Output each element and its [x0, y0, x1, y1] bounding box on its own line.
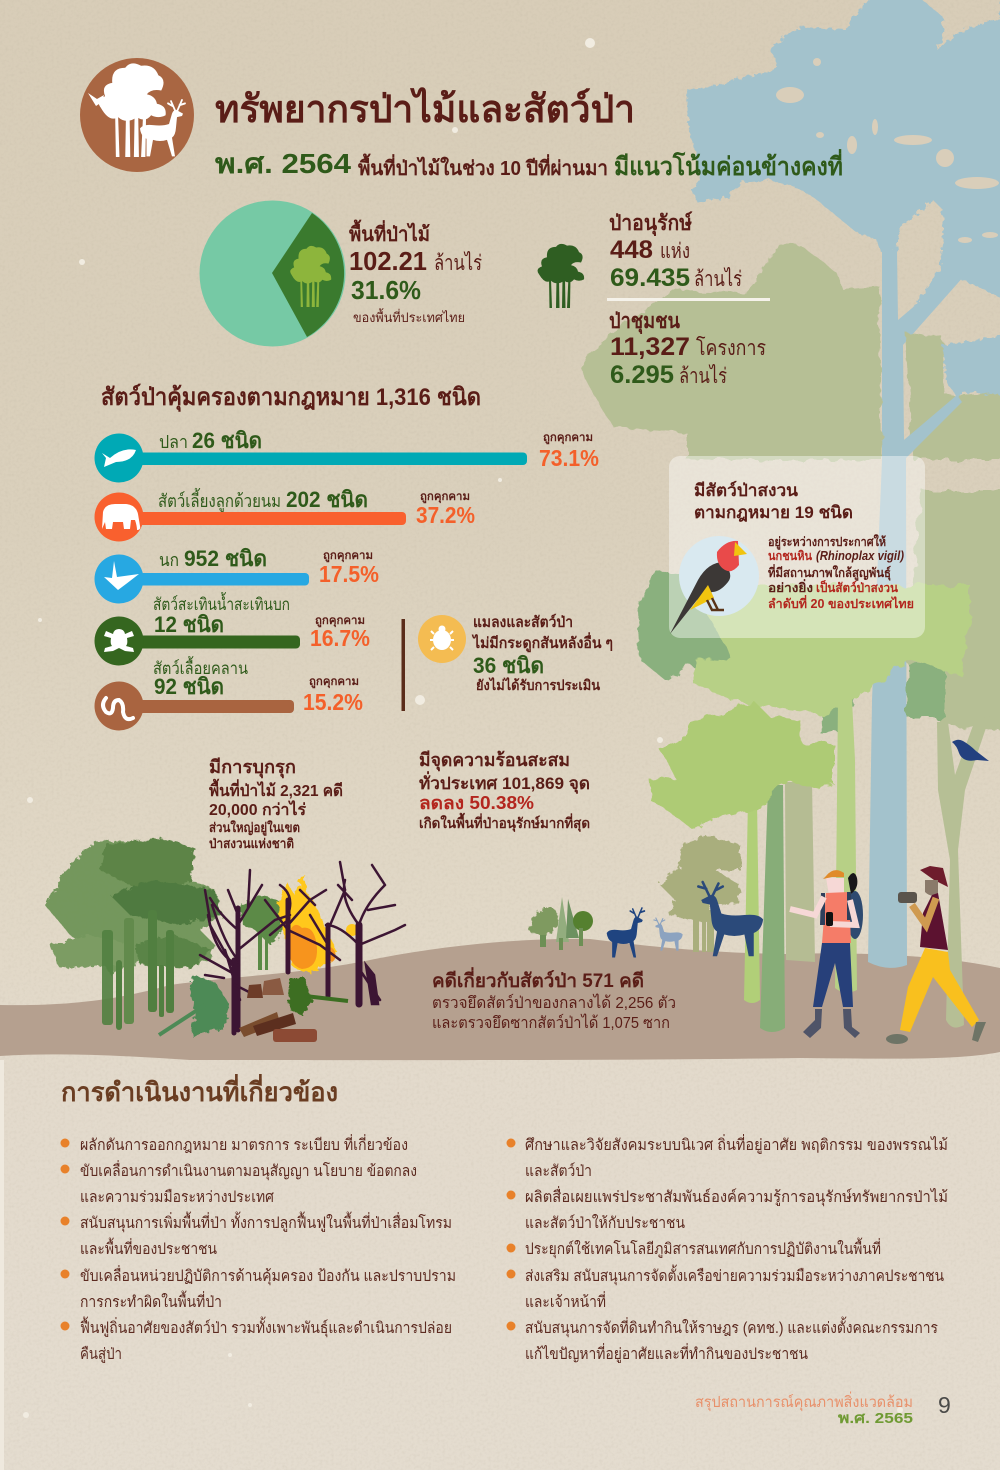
- wildlife cases stats: [432, 967, 676, 1032]
- list: operations left column: ขับเคลื่อนการดำเนินงานตามอนุสัญญา นโยบาย ข้อตกลง: [80, 1160, 417, 1181]
- list: operations right column: [506, 1134, 948, 1364]
- forest area stats: 31.6%: [351, 275, 421, 305]
- bar: reptiles: ถูกคุกคาม: [309, 676, 359, 689]
- hiker with backpack: [790, 870, 863, 1038]
- left forest trees: [45, 838, 222, 1030]
- hotspot stats: ลดลง 50.38%: [419, 793, 534, 813]
- bar: amphibians: 12 ชนิด: [154, 612, 224, 637]
- bar: mammals: สัตว์เลี้ยงลูกด้วยนม: [158, 488, 281, 512]
- dead trees: [200, 862, 405, 1033]
- bar: birds: 17.5%: [319, 561, 379, 587]
- pie chart: forest share: [200, 200, 346, 346]
- list: operations right column: และเจ้าหน้าที่: [525, 1291, 606, 1311]
- encroachment stats: ส่วนใหญ่อยู่ในเขต: [209, 819, 300, 836]
- bar: reptiles: 15.2%: [303, 689, 363, 715]
- insects block: แมลงและสัตว์ป่า: [473, 613, 573, 631]
- callout panel: reserved wildlife: [669, 456, 925, 638]
- insects block: [418, 613, 613, 693]
- icon: tree: [538, 244, 584, 308]
- background trees: olive distant: [660, 835, 740, 952]
- footer source: [695, 1391, 913, 1427]
- list: operations right column: ส่งเสริม สนับสนุนการจัดตั้งเครือข่ายความร่วมมือระหว่างภาคประชาชน: [525, 1264, 944, 1286]
- callout body text: ที่มีสถานภาพใกล้สูญพันธุ์: [768, 564, 891, 581]
- list: operations right column: ผลิตสื่อเผยแพร่ประชาสัมพันธ์องค์ความรู้การอนุรักษ์ทรัพยากรป่าไม้: [525, 1186, 948, 1207]
- callout body text: (Rhinoplax vigil): [816, 549, 904, 563]
- wildlife cases stats: คดีเกี่ยวกับสัตว์ป่า 571 คดี: [432, 967, 644, 992]
- insects block: 36 ชนิด: [473, 653, 544, 678]
- small tree cluster: [530, 897, 593, 950]
- encroachment stats: ป่าสงวนแห่งชาติ: [209, 836, 294, 851]
- callout body text: เป็นสัตว์ป่าสงวน: [816, 580, 898, 595]
- conservation and community forest stats: แห่ง: [660, 240, 690, 263]
- bar: fish: ปลา: [159, 432, 188, 452]
- bird: perched blue: [952, 740, 989, 761]
- title: ทรัพยากรป่าไม้และสัตว์ป่า: [215, 87, 635, 131]
- hotspot stats: [419, 750, 590, 832]
- callout body text: [768, 534, 914, 611]
- bar: fish: ถูกคุกคาม: [543, 432, 593, 445]
- forest area stats: พื้นที่ป่าไม้: [349, 219, 430, 246]
- list: operations left column: [60, 1134, 456, 1364]
- callout body text: อย่างยิ่ง: [768, 579, 813, 595]
- bar: mammals: 37.2%: [416, 502, 475, 528]
- list: operations left column: และพื้นที่ของประชาชน: [80, 1237, 217, 1258]
- list: operations right column: แก้ไขปัญหาที่อยู่อาศัยและที่ทำกินของประชาชน: [525, 1343, 808, 1364]
- list: operations right column: ประยุกต์ใช้เทคโนโลยีภูมิสารสนเทศกับการปฏิบัติงานในพื้นที่: [525, 1237, 881, 1259]
- wildlife cases stats: ตรวจยึดสัตว์ป่าของกลางได้ 2,256 ตัว: [432, 993, 676, 1012]
- conservation and community forest stats: 69.435: [610, 264, 690, 292]
- conservation and community forest stats: ป่าอนุรักษ์: [609, 211, 692, 237]
- list: operations right column: สนับสนุนการจัดที่ดินทำกินให้ราษฎร (คทช.) และแต่งตั้งคณะกรรมการ: [525, 1316, 938, 1338]
- logo badge: [80, 58, 194, 172]
- insects block: ยังไม่ได้รับการประเมิน: [476, 676, 600, 693]
- list: operations left column: ขับเคลื่อนหน่วยปฏิบัติการด้านคุ้มครอง ป้องกัน และปราบปราม: [80, 1265, 456, 1286]
- callout body text: นกชนหิน: [768, 549, 812, 563]
- conservation and community forest stats: 448: [610, 236, 653, 264]
- subtitle: มีแนวโน้มค่อนข้างคงที่: [614, 149, 843, 181]
- list: operations right column: และสัตว์ป่า: [525, 1162, 592, 1180]
- bar: birds: 952 ชนิด: [184, 546, 267, 571]
- background tree: blue: [687, 0, 1000, 968]
- bar: amphibians: ถูกคุกคาม: [315, 615, 365, 628]
- small green tree in fire scene: [240, 895, 290, 970]
- footer source: สรุปสถานการณ์คุณภาพสิ่งแวดล้อม: [695, 1391, 913, 1412]
- background tree: mid green crown: [637, 570, 945, 733]
- bar: birds: ถูกคุกคาม: [323, 550, 373, 563]
- bar: fish: 73.1%: [539, 445, 599, 471]
- forest area stats: ของพื้นที่ประเทศไทย: [353, 308, 465, 325]
- list: operations left column: ฟื้นฟูถิ่นอาศัยของสัตว์ป่า รวมทั้งเพาะพันธุ์และดำเนินการปล่อย: [80, 1316, 452, 1338]
- subtitle: พื้นที่ป่าไม้ในช่วง 10 ปีที่ผ่านมา: [358, 153, 608, 180]
- encroachment stats: พื้นที่ป่าไม้ 2,321 คดี: [209, 778, 343, 800]
- heading: protected wildlife: สัตว์ป่าคุ้มครองตามกฎหมาย 1,316 ชนิด: [101, 383, 481, 413]
- bar: fish: [94, 428, 599, 482]
- callout heading: ตามกฎหมาย 19 ชนิด: [694, 503, 853, 522]
- footer source: พ.ศ. 2565: [838, 1410, 913, 1427]
- conservation and community forest stats: [607, 211, 770, 389]
- deer: pale: [654, 918, 683, 951]
- icon: insect: [418, 615, 466, 663]
- subtitle: พ.ศ. 2564: [215, 148, 351, 179]
- callout body text: ลำดับที่ 20 ของประเทศไทย: [768, 595, 914, 611]
- list: operations left column: คืนสู่ป่า: [80, 1345, 122, 1364]
- hotspot stats: เกิดในพื้นที่ป่าอนุรักษ์มากที่สุด: [419, 812, 590, 832]
- list: operations left column: ผลักดันการออกกฎหมาย มาตรการ ระเบียบ ที่เกี่ยวข้อง: [80, 1134, 408, 1154]
- background tree: olive crown: [580, 243, 1000, 1028]
- encroachment stats: มีการบุกรุก: [209, 757, 296, 779]
- forest area stats: [349, 219, 482, 325]
- hornbill illustration: [670, 536, 759, 634]
- deer: navy big: [698, 882, 763, 956]
- conservation and community forest stats: ล้านไร่: [679, 364, 727, 388]
- conservation and community forest stats: 11,327: [610, 333, 690, 361]
- fallen branches: [159, 975, 348, 1037]
- deer: navy small: [607, 908, 644, 958]
- heading: related operations: การดำเนินงานที่เกี่ยวข้อง: [61, 1073, 338, 1107]
- background tree: light green crown: [690, 585, 970, 715]
- bar: amphibians: 16.7%: [310, 625, 370, 651]
- insects block: ไม่มีกระดูกสันหลังอื่น ๆ: [471, 632, 613, 653]
- list: operations right column: ศึกษาและวิจัยสังคมระบบนิเวศ ถิ่นที่อยู่อาศัย พฤติกรรม ของพรรณไม้: [525, 1134, 948, 1155]
- conservation and community forest stats: โครงการ: [696, 336, 766, 360]
- forest area stats: 102.21: [349, 246, 427, 276]
- conservation and community forest stats: ป่าชุมชน: [609, 310, 681, 335]
- fire: [278, 873, 358, 973]
- encroachment stats: 20,000 กว่าไร่: [209, 800, 306, 819]
- bar: birds: นก: [159, 550, 179, 570]
- list: operations left column: การกระทำผิดในพื้นที่ป่า: [80, 1290, 222, 1311]
- bar: mammals: ถูกคุกคาม: [420, 491, 470, 504]
- trunks: [744, 700, 857, 1032]
- bar: reptiles: สัตว์เลื้อยคลาน: [153, 656, 248, 678]
- bar: fish: 26 ชนิด: [192, 428, 262, 453]
- wildlife cases stats: และตรวจยึดซากสัตว์ป่าได้ 1,075 ซาก: [432, 1013, 670, 1032]
- background tree: blue lower branch and right crown: [904, 335, 1000, 458]
- bar: amphibians: สัตว์สะเทินน้ำสะเทินบก: [153, 592, 290, 614]
- list: operations left column: และความร่วมมือระหว่างประเทศ: [80, 1188, 274, 1206]
- ground band: [0, 939, 1000, 1060]
- encroachment stats: [209, 757, 343, 851]
- logs and stumps: [239, 978, 317, 1042]
- conservation and community forest stats: 6.295: [610, 361, 674, 389]
- forest area stats: ล้านไร่: [434, 251, 482, 275]
- hotspot stats: มีจุดความร้อนสะสม: [419, 750, 570, 772]
- bar: birds: [94, 546, 379, 604]
- list: operations right column: และสัตว์ป่าให้กับประชาชน: [525, 1214, 685, 1232]
- bar: reptiles: 92 ชนิด: [154, 674, 224, 699]
- bar: mammals: 202 ชนิด: [286, 487, 368, 512]
- conservation and community forest stats: ล้านไร่: [694, 267, 742, 291]
- light green foreground crown: [647, 700, 833, 830]
- hotspot stats: ทั่วประเทศ 101,869 จุด: [419, 771, 590, 794]
- page number: 9: [938, 1392, 951, 1418]
- callout heading: [694, 480, 853, 522]
- callout heading: มีสัตว์ป่าสงวน: [694, 480, 798, 500]
- bar: reptiles: [94, 656, 363, 730]
- bar: amphibians: [94, 592, 370, 666]
- subtitle: [215, 148, 843, 181]
- list: operations left column: สนับสนุนการเพิ่มพื้นที่ป่า ทั้งการปลูกฟื้นฟูในพื้นที่ป่าเสื่อมโทรม: [80, 1211, 452, 1233]
- bar: mammals: [94, 487, 475, 542]
- hiker with camera: [886, 866, 986, 1044]
- callout body text: อยู่ระหว่างการประกาศให้: [768, 534, 886, 550]
